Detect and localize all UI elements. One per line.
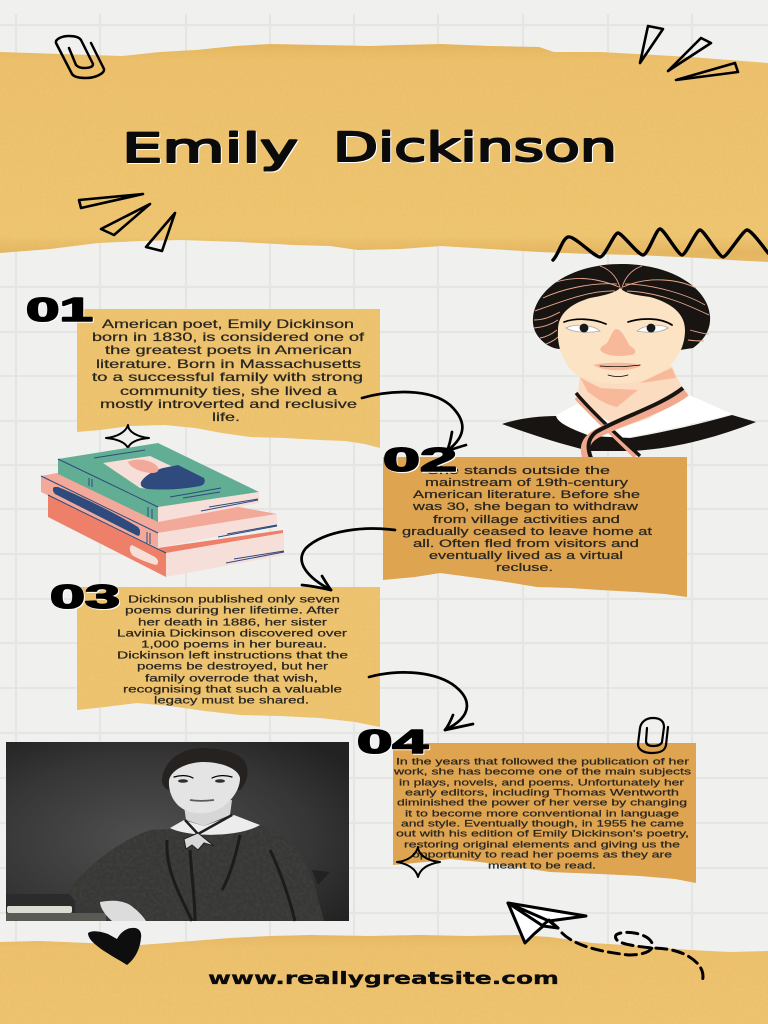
text block 04: early editors, including Thomas Wentworth — [405, 788, 679, 798]
text block 04: restoring original elements and giving us the — [404, 840, 680, 850]
text block 01: literature. Born in Massachusetts — [96, 358, 361, 371]
icon: sparkle on panel 04 — [397, 847, 440, 877]
arrow: 02 to 03 — [302, 529, 395, 590]
facial features — [174, 776, 232, 778]
book details — [41, 450, 284, 563]
text block 02: American literature. Before she — [413, 489, 640, 501]
text block 04: meant to be read. — [488, 860, 596, 872]
text block 02: She stands outside the — [427, 465, 610, 477]
eyes — [566, 325, 600, 332]
text block 04: In the years that followed the publication of her — [396, 756, 689, 768]
panel 01: text card — [77, 309, 380, 448]
text block 04: it to become more conventional in language — [405, 808, 679, 820]
photo: portrait of Emily Dickinson — [6, 742, 349, 921]
website url: www.reallygreatsite.com — [208, 969, 559, 989]
dress — [67, 825, 324, 921]
text block 03: poems during her lifetime. After — [125, 606, 340, 616]
icon: burst triangles top right — [640, 26, 738, 80]
icon: black heart — [88, 928, 141, 965]
top book — [58, 443, 259, 507]
text block 03: Dickinson left instructions that the — [117, 650, 349, 662]
title — [122, 125, 617, 172]
text block 04: opportunity to read her poems as they are — [412, 850, 672, 860]
hair — [533, 264, 710, 350]
hand — [100, 901, 146, 921]
icon: paper clip on panel 04 — [638, 718, 668, 753]
text block 01: life. — [212, 411, 240, 424]
face — [558, 288, 685, 384]
black shoulders — [502, 415, 756, 451]
panel 04: text card — [393, 743, 696, 883]
text block 02: all. Often fled from visitors and — [413, 538, 639, 550]
text block 03: legacy must be shared. — [154, 696, 309, 706]
text block 04: work, she has become one of the main subjects — [393, 766, 691, 778]
nose — [600, 329, 635, 356]
text block 02: mainstream of 19th-century — [425, 477, 629, 489]
text block 04: diminished the power of her verse by changing — [397, 798, 687, 808]
arrow: 01 to 02 — [362, 392, 466, 451]
hair — [162, 748, 247, 790]
icon: dashed flight path — [562, 932, 703, 982]
text block 03: Dickinson published only seven — [128, 594, 340, 606]
neck — [578, 366, 684, 436]
icon: paper clip top left — [56, 36, 104, 78]
text block 02: from village activities and — [433, 514, 620, 526]
text block 04: in plays, novels, and poems. Unfortunately her — [399, 778, 684, 788]
icon: zigzag squiggle — [553, 229, 768, 260]
icon: sparkle above books — [106, 425, 149, 448]
text block 02: eventually lived as a virtual — [429, 550, 623, 562]
text block 03: her death in 1886, her sister — [138, 618, 328, 628]
text block 01: mostly introverted and reclusive — [100, 398, 357, 411]
text block 01: to a successful family with strong — [92, 371, 363, 384]
face — [169, 762, 240, 813]
text block 02 — [402, 465, 652, 574]
text block 03: recognising that such a valuable — [123, 684, 343, 696]
text block 01 — [92, 318, 365, 424]
number 02: 02 — [383, 441, 457, 478]
text block 01: American poet, Emily Dickinson — [102, 318, 354, 331]
illustration: stack of books — [41, 443, 284, 577]
number 04: 04 — [357, 723, 429, 760]
collar ribbons — [577, 397, 636, 456]
icon: burst triangles left — [79, 194, 175, 251]
text block 01: born in 1830, is considered one of — [92, 331, 365, 344]
text block 03: Lavinia Dickinson discovered over — [117, 628, 348, 640]
white collar — [555, 394, 732, 437]
eyebrows — [564, 319, 672, 325]
panel 02: text card — [383, 457, 687, 597]
text block 01: the greatest poets in American — [105, 344, 352, 357]
table and book — [6, 894, 75, 921]
text block 03: 1,000 poems in her bureau. — [141, 640, 327, 650]
text block 04: out with his edition of Emily Dickinson's poetry, — [396, 828, 689, 840]
title: Dickinson — [333, 125, 617, 171]
text block 04 — [393, 756, 691, 872]
panel: bottom torn paper banner — [0, 935, 768, 1024]
text block 01: community ties, she lived a — [120, 385, 338, 398]
text block 03 — [117, 594, 349, 706]
text block 03: poems be destroyed, but her — [137, 662, 329, 672]
illustration: poet portrait — [502, 264, 756, 458]
text block 04: and style. Eventually though, in 1955 he came — [401, 818, 684, 830]
lips — [593, 363, 642, 370]
middle book — [41, 473, 277, 533]
text block 02: recluse. — [496, 562, 553, 574]
neck — [184, 800, 232, 826]
text block 03: family overrode that wish, — [145, 674, 318, 684]
number 03: 03 — [50, 578, 120, 615]
title: Emily — [122, 126, 298, 172]
number 01: 01 — [26, 291, 93, 328]
icon: paper plane — [508, 903, 586, 943]
bottom book — [48, 495, 166, 577]
collar and bow — [170, 815, 260, 835]
text block 02: was 30, she began to withdraw — [411, 501, 639, 513]
arrow: 03 to 04 — [369, 672, 473, 730]
text block 02: gradually ceased to leave home at — [402, 526, 652, 538]
panel: top torn paper banner — [0, 44, 768, 262]
panel 03: text card — [77, 587, 380, 727]
